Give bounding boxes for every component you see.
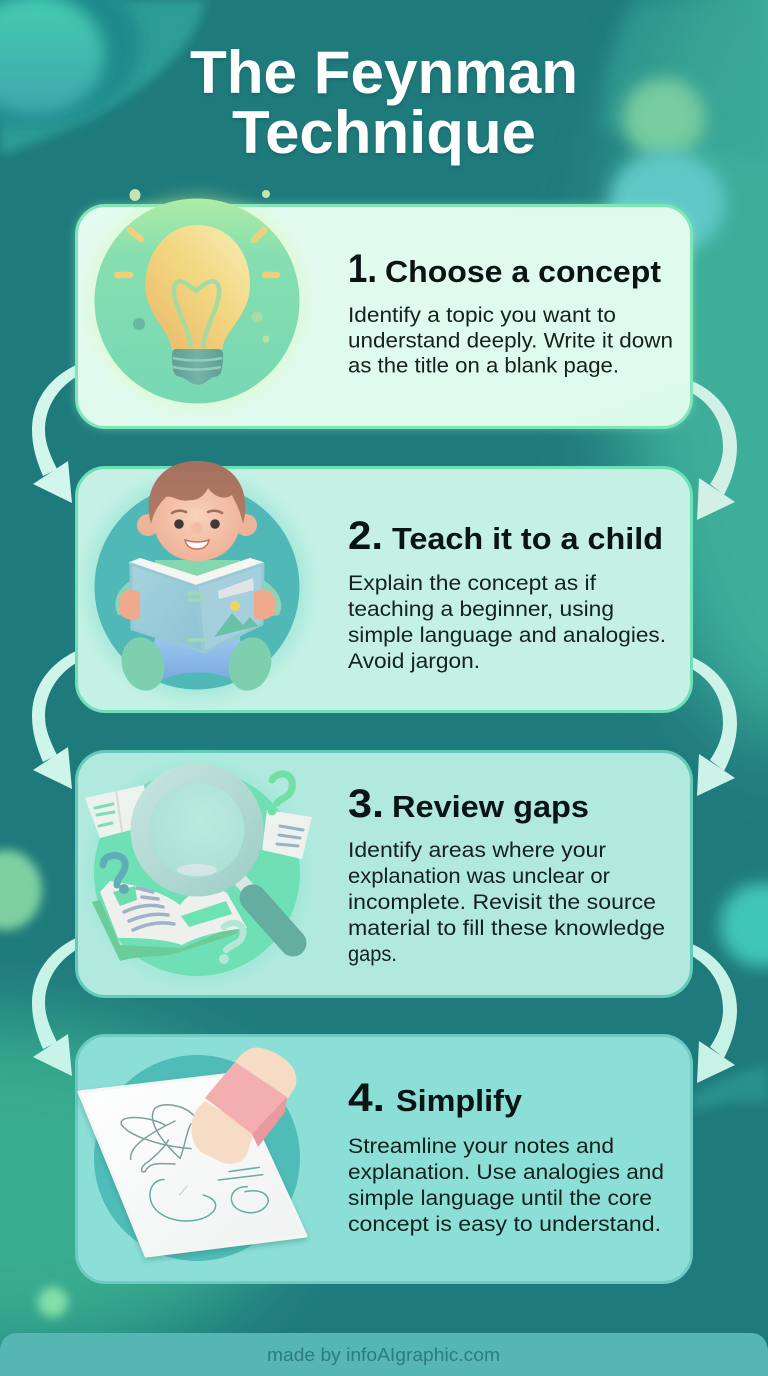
text: step 4 body: simple language until the core bbox=[348, 1187, 652, 1210]
icon: light bulb bbox=[91, 189, 303, 407]
title: Technique bbox=[232, 99, 536, 166]
heading: step 2 bbox=[348, 514, 663, 558]
arrow: card 3 to card 4, left bbox=[32, 938, 76, 1076]
heading: step 3 bbox=[348, 782, 589, 826]
text: step 4 body: explanation. Use analogies and bbox=[348, 1161, 664, 1184]
panel: step 1 choose a concept bbox=[76, 189, 692, 428]
text: step 3 body: explanation was unclear or bbox=[348, 865, 610, 888]
heading: step 4 bbox=[348, 1076, 523, 1120]
text: step 3 body: gaps. bbox=[348, 943, 397, 966]
text: step 2 body: Avoid jargon. bbox=[348, 650, 480, 673]
arrow: card 2 to card 3, left bbox=[32, 651, 76, 789]
heading: step 3: Review gaps bbox=[392, 789, 589, 824]
heading: step 2: 2. bbox=[348, 514, 383, 558]
text: step 2 body: teaching a beginner, using bbox=[348, 598, 614, 621]
heading: step 1: 1. bbox=[348, 247, 377, 291]
arrow: card 3 to card 4, right bbox=[692, 944, 737, 1083]
text: step 2 body: Explain the concept as if bbox=[348, 572, 596, 595]
heading: step 1: Choose a concept bbox=[385, 254, 661, 289]
heading: step 2: Teach it to a child bbox=[392, 521, 663, 556]
panel: step 4 simplify bbox=[76, 1036, 692, 1282]
text: step 4 body: concept is easy to understand. bbox=[348, 1213, 661, 1236]
panel: step 2 teach it to a child bbox=[76, 461, 692, 712]
footer bbox=[0, 1333, 768, 1376]
icon: magnifying glass and book bbox=[85, 763, 312, 983]
text: step 4 body: Streamline your notes and bbox=[348, 1135, 614, 1158]
text: step 1 body: as the title on a blank page. bbox=[348, 354, 619, 378]
text: step 4 body bbox=[348, 1135, 664, 1236]
heading: step 4: Simplify bbox=[396, 1083, 523, 1118]
text: step 3 body: incomplete. Revisit the source bbox=[348, 891, 656, 914]
arrow: card 1 to card 2, right bbox=[692, 381, 737, 520]
text: step 2 body: simple language and analogies. bbox=[348, 624, 666, 647]
title bbox=[190, 39, 578, 166]
panel: step 3 review gaps bbox=[76, 752, 692, 996]
text: step 3 body bbox=[348, 839, 665, 966]
icon: child reading a book bbox=[87, 461, 307, 697]
text: step 1 body bbox=[348, 304, 673, 378]
heading: step 1 bbox=[348, 247, 661, 291]
heading: step 3: 3. bbox=[348, 782, 384, 826]
icon: paper and eraser bbox=[79, 1049, 306, 1261]
arrow: card 2 to card 3, right bbox=[692, 657, 737, 796]
title: The Feynman bbox=[190, 39, 578, 106]
text: step 1 body: understand deeply. Write it down bbox=[348, 330, 673, 352]
arrow: card 1 to card 2, left bbox=[32, 365, 76, 503]
footer: made by infoAIgraphic.com bbox=[267, 1345, 500, 1365]
text: step 3 body: material to fill these knowledge bbox=[348, 917, 665, 940]
text: step 3 body: Identify areas where your bbox=[348, 839, 606, 862]
text: step 1 body: Identify a topic you want to bbox=[348, 304, 616, 327]
heading: step 4: 4. bbox=[348, 1076, 385, 1120]
text: step 2 body bbox=[348, 572, 666, 673]
